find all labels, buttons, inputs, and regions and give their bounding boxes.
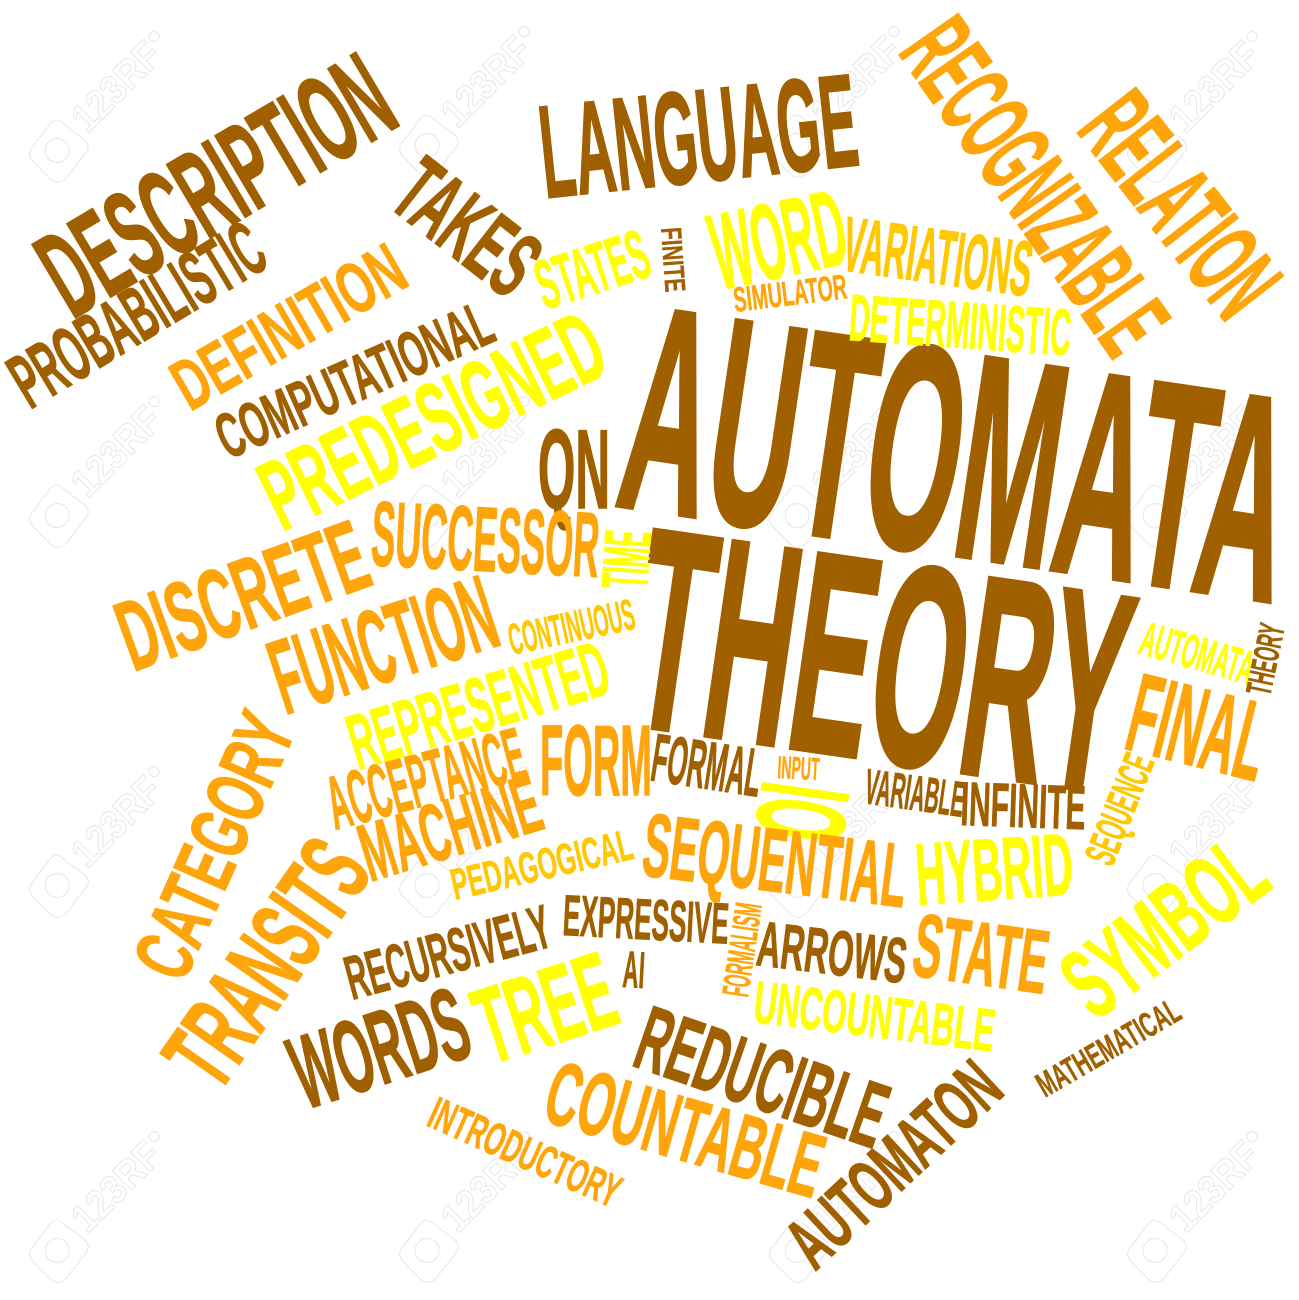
word: REDUCIBLE: REDUCIBLE — [623, 987, 901, 1168]
word cloud: LANGUAGE — [533, 46, 864, 226]
word: AUTOMATON: AUTOMATON — [769, 1044, 1018, 1284]
word: PEDAGOGICAL: PEDAGOGICAL — [446, 820, 638, 910]
word: FINITE: FINITE — [654, 226, 690, 293]
word: MATHEMATICAL: MATHEMATICAL — [1030, 991, 1188, 1105]
word cloud: HYBRID — [912, 814, 1076, 924]
word cloud: INFINITE — [960, 770, 1087, 843]
word: DISCRETE: DISCRETE — [102, 499, 383, 693]
word: SIMULATOR: SIMULATOR — [731, 267, 849, 320]
word: TREE: TREE — [460, 929, 630, 1087]
word cloud: TIME — [587, 528, 665, 591]
word cloud: SUCCESSOR — [369, 483, 602, 597]
word cloud: ACCEPTANCE — [317, 712, 535, 846]
word cloud: STATES — [526, 215, 659, 324]
word: INTRODUCTORY: INTRODUCTORY — [421, 1087, 629, 1218]
word: CATEGORY: CATEGORY — [116, 700, 313, 992]
word cloud: INPUT — [777, 749, 821, 787]
word: COUNTABLE: COUNTABLE — [534, 1043, 835, 1218]
word: TAKES: TAKES — [374, 138, 560, 316]
word: PROBABILISTIC: PROBABILISTIC — [0, 204, 280, 425]
word cloud: AI — [621, 941, 646, 1000]
word cloud: VARIABLE — [861, 758, 968, 828]
word cloud: CONTINUOUS — [504, 590, 639, 665]
word: RECURSIVELY: RECURSIVELY — [338, 893, 558, 1014]
word cloud: EXPRESSIVE — [561, 883, 730, 957]
word cloud: WORD — [700, 166, 857, 312]
word: STATE: STATE — [907, 896, 1055, 1014]
word: DEFINITION: DEFINITION — [158, 229, 420, 426]
word: PREDESIGNED: PREDESIGNED — [243, 290, 622, 552]
word cloud: IO — [729, 775, 876, 849]
word cloud: QN — [538, 407, 610, 532]
word cloud: WORDS — [276, 966, 483, 1132]
word cloud: REPRESENTED — [337, 624, 619, 786]
word: UNCOUNTABLE: UNCOUNTABLE — [750, 968, 999, 1064]
word cloud: FUNCTION — [256, 554, 511, 737]
word: COMPUTATIONAL: COMPUTATIONAL — [204, 287, 504, 473]
word: SEQUENCE: SEQUENCE — [1076, 747, 1164, 872]
word: MACHINE: MACHINE — [349, 758, 552, 899]
word cloud: SEQUENTIAL — [638, 796, 913, 927]
word cloud: FORM — [540, 705, 652, 817]
word cloud: FORMAL — [647, 720, 767, 812]
word: TRANSITS: TRANSITS — [142, 819, 393, 1108]
word: ARROWS: ARROWS — [753, 907, 911, 997]
word cloud: FORMALISM — [715, 900, 771, 999]
